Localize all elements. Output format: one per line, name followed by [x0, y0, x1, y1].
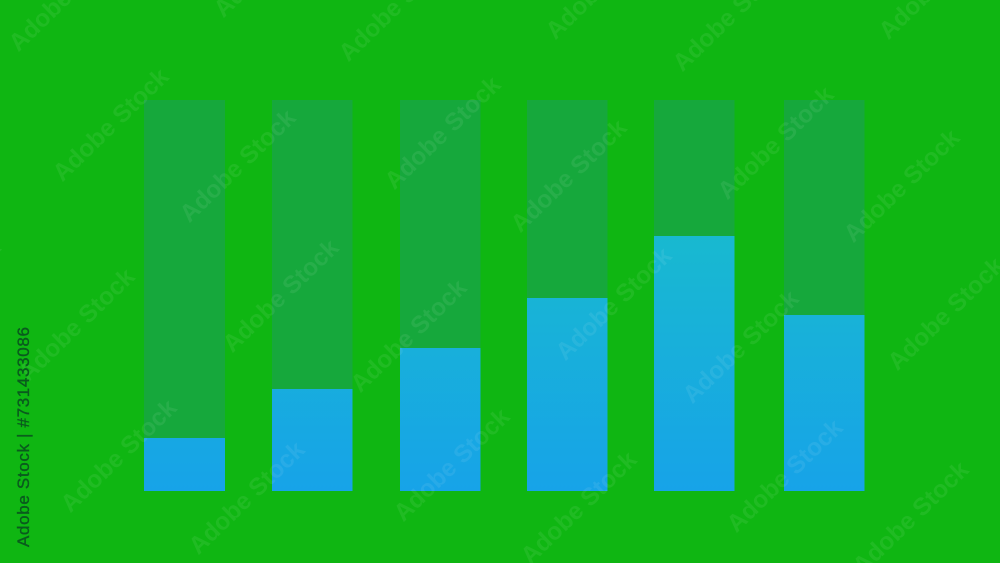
watermark pattern: Adobe Stock — [506, 114, 633, 238]
watermark pattern: Adobe Stock — [14, 263, 141, 387]
watermark pattern: Adobe Stock — [389, 403, 516, 527]
watermark pattern: Adobe Stock — [56, 394, 183, 518]
bar 2 — [272, 100, 352, 491]
watermark pattern: Adobe Stock — [839, 124, 966, 248]
watermark pattern: Adobe Stock — [722, 414, 849, 538]
watermark pattern: Adobe Stock — [713, 81, 840, 205]
bar 3 — [400, 100, 480, 491]
watermark pattern: Adobe Stock — [184, 436, 311, 560]
bar 5 — [654, 100, 734, 491]
watermark pattern: Adobe Stock — [175, 104, 302, 228]
side credit text: Adobe Stock | #731433086 — [14, 327, 33, 547]
bar 1 — [144, 100, 225, 491]
watermark pattern: Adobe Stock — [218, 234, 345, 358]
bar chart — [144, 100, 864, 491]
watermark pattern: Adobe Stock — [380, 71, 507, 195]
watermark pattern: Adobe Stock — [346, 274, 473, 398]
watermark pattern: Adobe Stock — [551, 242, 678, 366]
watermark pattern: Adobe Stock — [678, 285, 805, 409]
bar 6 — [784, 100, 864, 491]
bar 4 — [527, 100, 608, 491]
watermark pattern: Adobe Stock — [48, 63, 175, 187]
